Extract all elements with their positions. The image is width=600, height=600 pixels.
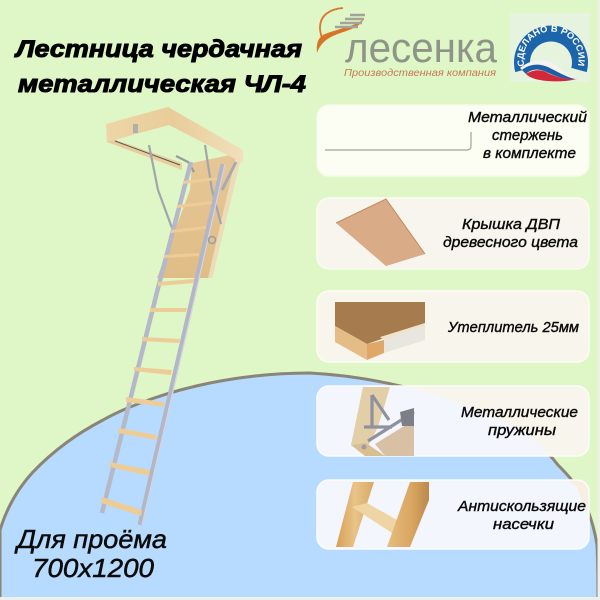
card text [461,404,578,439]
icon: insulation section [335,302,425,360]
logo: Лесенка [317,8,498,79]
logo wordmark: лесенка [345,24,498,71]
ladder: far frame beam [107,139,182,170]
ladder: left rail [102,162,191,513]
card text: в комплекте [483,145,576,162]
card text: Утеплитель 25мм [447,319,579,336]
badge: сделано в России [510,13,590,82]
icon: stair swoosh [317,8,365,53]
icon: wooden rail [336,482,429,547]
card text [457,498,586,533]
card: Металлический стержень [317,105,589,176]
caption: opening size: 700х1200 [32,553,155,583]
card: Металлические пружины [317,386,589,456]
card text: Металлический [468,109,588,126]
ladder: steps [101,177,217,516]
card text: Металлические [461,404,578,421]
card text [468,109,588,162]
card text: насечки [493,516,555,533]
icon: spring hinge [351,387,414,456]
blue arc background [0,373,598,600]
logo tagline: Производственная компания [344,67,496,79]
icon: fibreboard lid [336,199,425,266]
caption: opening size [14,524,167,583]
ladder: hatch panel [157,154,240,278]
caption: opening size: Для проёма [14,524,167,554]
card text: древесного цвета [443,234,578,251]
card text: Крышка ДВП [462,216,560,233]
card text: пружины [488,422,556,439]
card text: стержень [492,127,563,144]
ladder: right rail [140,164,223,525]
card: Антискользящие насечки [317,480,589,549]
card: Утеплитель [317,291,589,362]
icon: metal rod [325,132,471,150]
ladder: frame front [106,107,169,142]
ladder: arm struts [149,145,221,228]
ladder [101,107,243,525]
card text [443,216,578,251]
badge: сделано в России: СДЕЛАНО В РОССИИ [517,25,585,66]
title [14,36,306,98]
title: Лестница чердачная [14,36,302,63]
card text: Антискользящие [457,498,586,515]
title: металлическая ЧЛ-4 [18,71,306,98]
card: Крышка ДВП [317,198,589,269]
